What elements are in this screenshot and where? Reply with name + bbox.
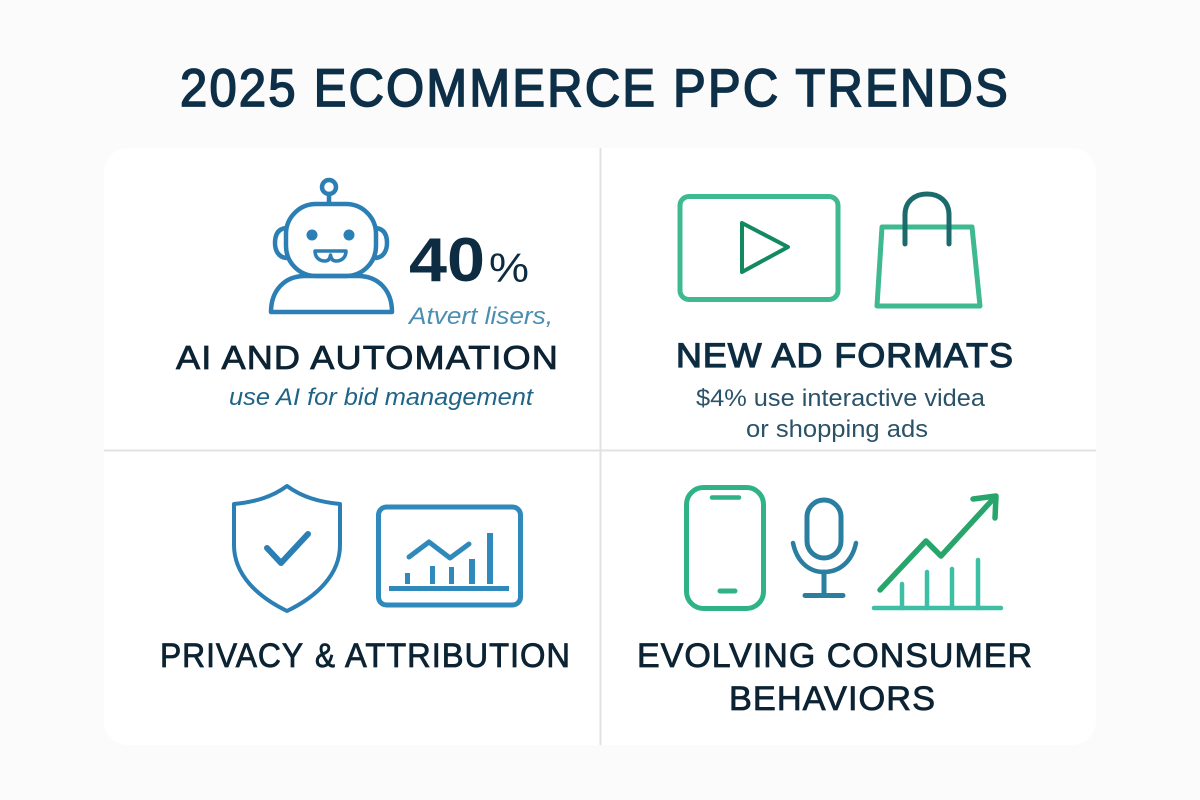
- panel: card grid: [104, 148, 1096, 745]
- text: ad format stat: [696, 385, 986, 443]
- text: advertisers line: Atvert lisers,: [407, 303, 553, 330]
- panel: AI and automation: [176, 180, 559, 411]
- icon: smartphone: [686, 488, 764, 608]
- heading: new ad formats: NEW AD FORMATS: [676, 337, 1014, 375]
- icon: shield with check: [234, 486, 340, 611]
- stat: 40 percent: %: [489, 245, 529, 291]
- panel: privacy and attribution: [160, 486, 571, 675]
- text: AI bid management: use AI for bid management: [229, 384, 534, 411]
- text: ad format stat: $4% use interactive videa: [696, 385, 986, 412]
- heading: privacy and attribution: [160, 637, 571, 675]
- icon: video player: [680, 196, 838, 300]
- panel: evolving consumer behaviors: [637, 488, 1033, 718]
- icon: growth chart with arrow: [874, 496, 1001, 608]
- stat: 40 percent: [409, 226, 529, 295]
- heading: privacy and attribution: ATTRIBUTION: [345, 637, 571, 675]
- heading: evolving consumer behaviors: EVOLVING CONSUMER: [637, 637, 1033, 675]
- icon: robot: [271, 180, 392, 312]
- heading: privacy and attribution: &: [315, 637, 335, 675]
- heading: evolving consumer behaviors: BEHAVIORS: [729, 680, 936, 718]
- heading: AI and automation: AI AND AUTOMATION: [176, 339, 559, 376]
- icon: microphone: [793, 500, 856, 596]
- icon: analytics dashboard: [378, 507, 520, 605]
- title: 2025 ECOMMERCE PPC TRENDS: [180, 59, 1010, 118]
- text: ad format stat: or shopping ads: [746, 416, 928, 443]
- heading: evolving consumer behaviors: [637, 637, 1033, 718]
- stat: 40 percent: 40: [409, 226, 485, 295]
- icon: shopping bag: [877, 194, 980, 306]
- heading: privacy and attribution: PRIVACY: [160, 637, 304, 675]
- panel: new ad formats: [676, 194, 1014, 443]
